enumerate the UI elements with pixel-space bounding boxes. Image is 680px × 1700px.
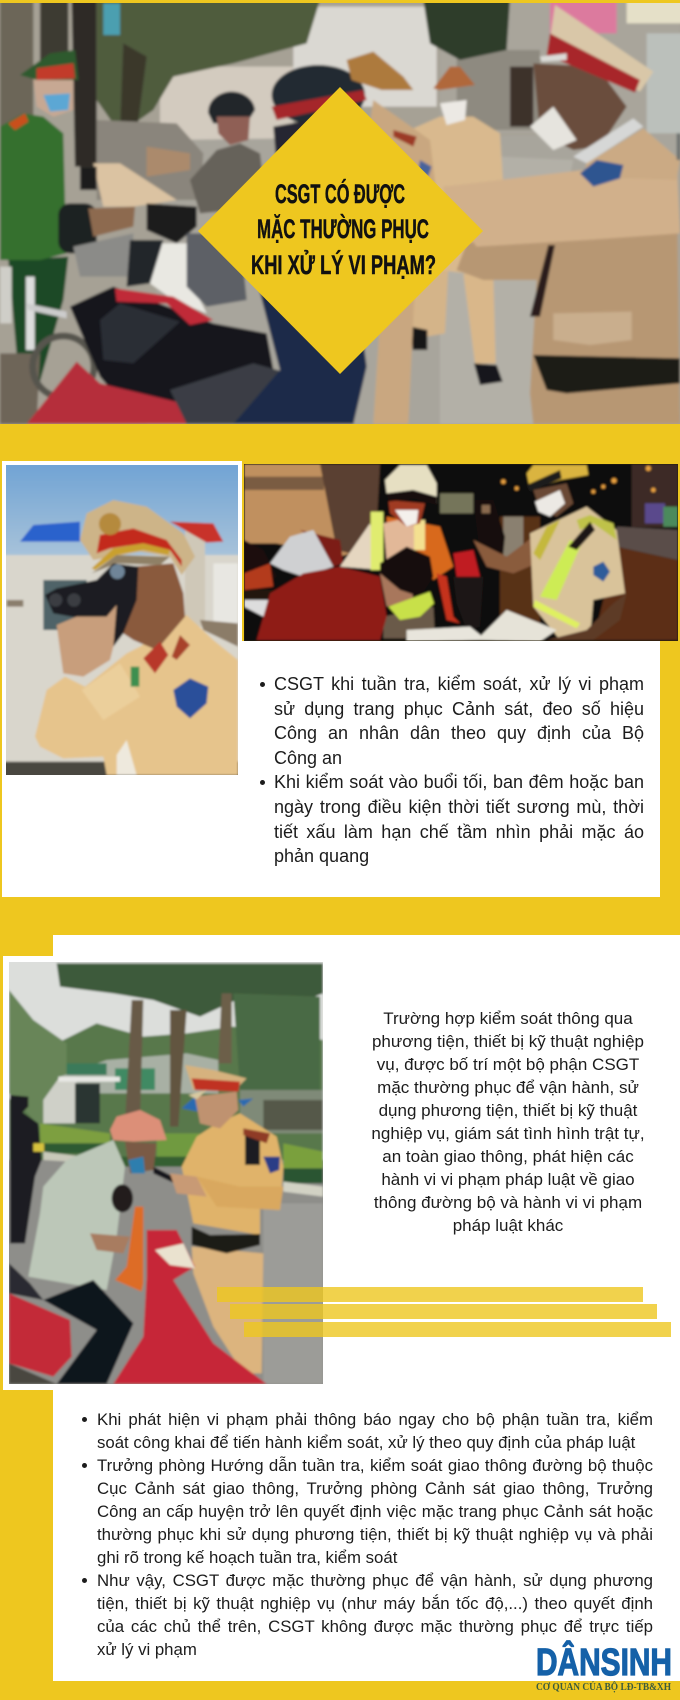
text block: reporting and decision rules: Như vậy, CSGT được mặc thường phục để vận hành, sử dụng phương: [97, 1571, 653, 1590]
text block: plainclothes case: dụng phương tiện, thiết bị kỹ thuật: [379, 1101, 637, 1120]
text block: reporting and decision rules: [82, 1410, 653, 1659]
decoration: three stacked yellow bars: [217, 1287, 671, 1337]
guard: [10, 1107, 42, 1243]
center rider: [233, 267, 367, 424]
text block: reporting and decision rules: của các chủ thể trên, CSGT không được mặc thường phục để trực tiếp: [97, 1617, 653, 1636]
background city: [440, 493, 473, 513]
text block: reporting and decision rules: Trưởng phòng Hướng dẫn tuần tra, kiểm soát giao thông đường bộ thuộc: [97, 1456, 653, 1475]
panel: top yellow background strip: [0, 0, 680, 3]
text block: plainclothes case: phương tiện, thiết bị kỹ thuật nghiệp: [372, 1032, 644, 1051]
text block: uniform rules: CSGT khi tuần tra, kiểm soát, xử lý vi phạm: [274, 674, 644, 694]
text block: reporting and decision rules: Cục Cảnh sát giao thông, Trưởng phòng Cảnh sát giao thông, Trưởng: [97, 1479, 653, 1498]
title diamond: KHI XỬ LÝ VI PHẠM?: [251, 248, 436, 280]
officer two: [473, 537, 537, 573]
text block: uniform rules: phản quang: [274, 846, 369, 866]
man in red: [383, 607, 435, 638]
text block: plainclothes case: mặc thường phục để vận hành, sử: [377, 1078, 639, 1097]
panel: second white content card: [53, 935, 680, 1681]
text block: uniform rules: ngày trong điều kiện thời tiết sương mù, thời: [274, 797, 644, 817]
text block: uniform rules: [260, 674, 644, 866]
text block: uniform rules: Công an nhân dân theo quy định của Bộ: [274, 723, 644, 743]
rider: [9, 1263, 43, 1300]
title diamond: [198, 87, 483, 374]
text block: reporting and decision rules: soát công khai để tiến hành kiểm soát, xử lý theo quy định của pháp luật: [97, 1433, 635, 1452]
photo: officer using a speed gun: [6, 465, 238, 775]
photo frame: white border around speed camera photo: [2, 461, 242, 781]
right officer: [443, 157, 680, 424]
mid officers: [412, 263, 448, 337]
text block: uniform rules: Công an: [274, 748, 342, 768]
hero photo: traffic police checking a motorbike rider: [0, 3, 680, 424]
officer one: [340, 523, 383, 570]
text block: uniform rules: Khi kiểm soát vào buổi tối, ban đêm hoặc ban: [274, 772, 644, 792]
photo: officer checking a motorcycle rider: [9, 962, 323, 1384]
photo frame: white border around roadside check photo: [3, 956, 63, 1390]
text block: reporting and decision rules: xử lý vi phạm: [97, 1640, 197, 1659]
panel: first card text background: [242, 641, 660, 781]
text block: plainclothes case: hành vi vi phạm pháp luật về giao: [381, 1170, 635, 1189]
green officer: [8, 257, 68, 393]
text block: reporting and decision rules: tiện, thiết bị kỹ thuật nghiệp vụ (như máy bắn tốc độ,...) theo quyết định: [97, 1594, 653, 1613]
text block: plainclothes case: [371, 1009, 645, 1235]
text block: plainclothes case: Trường hợp kiểm soát thông qua: [383, 1009, 633, 1028]
text block: plainclothes case: an toàn giao thông, phát hiện các: [382, 1147, 634, 1166]
text block: plainclothes case: thông đường bộ và hành vi vi phạm: [374, 1193, 642, 1212]
text block: reporting and decision rules: Khi phát hiện vi phạm phải thông báo ngay cho bộ phận tuần tra, kiểm: [97, 1410, 653, 1429]
title diamond: MẶC THƯỜNG PHỤC: [257, 213, 429, 244]
title diamond: CSGT CÓ ĐƯỢC: [275, 178, 405, 209]
officer: [192, 1247, 263, 1373]
text block: plainclothes case: pháp luật khác: [453, 1216, 563, 1235]
text block: plainclothes case: vụ, được bố trí một bộ phận CSGT: [377, 1055, 639, 1074]
text block: uniform rules: tiết xấu làm hạn chế tầm nhìn phải mặc áo: [274, 822, 644, 842]
text block: uniform rules: sử dụng trang phục Cảnh sát, đeo số hiệu: [274, 699, 644, 719]
panel: first white content card: [2, 776, 660, 897]
cone: [115, 1207, 143, 1292]
text block: reporting and decision rules: thường phục khi sử dụng phương tiện, thiết bị kỹ thuật nghiệp vụ và phải: [97, 1525, 653, 1544]
text block: reporting and decision rules: ghi rõ trong kế hoạch tuần tra, kiểm soát: [97, 1548, 397, 1567]
bike: [58, 203, 97, 253]
text block: plainclothes case: nghiệp vụ, giám sát tình hình trật tự,: [371, 1124, 645, 1143]
text block: reporting and decision rules: Công an cấp huyện trở lên quyết định việc mặc trang phục Cảnh sát hoặc: [97, 1502, 653, 1521]
photo: officers at night in reflective vests: [244, 464, 678, 641]
rider: [190, 143, 267, 213]
